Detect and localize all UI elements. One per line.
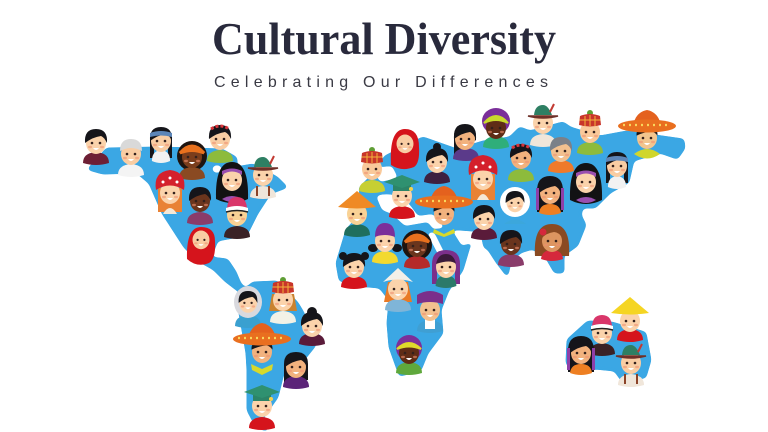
person: red hat, blond hair bbox=[269, 277, 297, 324]
person: black hair, maroon bbox=[83, 129, 109, 165]
person: hair bun, maroon bbox=[299, 307, 325, 346]
person: kokoshnik, Asia bbox=[469, 155, 497, 200]
person: red striped hat bbox=[359, 147, 385, 193]
person: red hijab bbox=[187, 227, 215, 265]
person: green mortarboard, Europe bbox=[384, 175, 420, 219]
map: North and Central America bbox=[89, 148, 286, 290]
map: Eurasia and Africa bbox=[337, 123, 684, 375]
person: floral headdress bbox=[207, 125, 233, 163]
person: black pigtails, red bbox=[339, 252, 369, 289]
person: colorful turban bbox=[482, 108, 510, 149]
person: purple hat, yellow clothes bbox=[368, 223, 402, 264]
person: black hijab bbox=[216, 162, 248, 203]
person: orange headband, Africa bbox=[402, 230, 432, 269]
person: dark skin, Asia bbox=[498, 230, 524, 267]
person: native headband, Asia bbox=[606, 152, 628, 189]
person: sombrero, yellow collar bbox=[233, 323, 291, 375]
title: Cultural Diversity bbox=[212, 14, 556, 64]
person: brown hair with flower bbox=[535, 224, 569, 261]
person: native headband bbox=[150, 127, 172, 163]
person: white hat, orange hair bbox=[383, 268, 413, 312]
person: green hat bbox=[248, 156, 278, 199]
person: black hair, Asia bbox=[471, 205, 497, 240]
person: colorful turban, South Africa bbox=[396, 335, 422, 375]
person: pink cap bbox=[224, 197, 250, 239]
person: red hat, Asia bbox=[577, 110, 603, 155]
map: South America bbox=[237, 282, 315, 430]
person: green hat, Australia bbox=[616, 344, 646, 387]
person: long hair, purple and orange bbox=[536, 176, 564, 215]
person: kokoshnik, orange hair bbox=[156, 170, 184, 214]
person: grey hair, orange robe bbox=[548, 137, 574, 173]
person: pink cap, Australia bbox=[589, 315, 615, 356]
person: purple long hair bbox=[432, 250, 460, 288]
person: sombrero, Russia bbox=[618, 110, 676, 158]
person: green hat, Asia bbox=[528, 104, 558, 147]
person: green mortarboard, red bbox=[244, 385, 280, 430]
person: hair bun, maroon, Europe bbox=[424, 143, 450, 184]
person: black hijab, Asia bbox=[570, 163, 602, 204]
person: orange headband bbox=[177, 141, 207, 180]
person: floral headdress, Asia bbox=[508, 144, 534, 182]
person: white hood, Asia bbox=[500, 187, 530, 224]
person: long black hair, purple bbox=[283, 352, 309, 389]
person: sombrero, Middle East bbox=[415, 186, 473, 237]
person: orange cone hat bbox=[338, 191, 376, 237]
person: red hijab Europe bbox=[391, 129, 419, 169]
person: long hair, Australia bbox=[567, 336, 595, 375]
person: yellow cone hat bbox=[611, 297, 649, 342]
person: purple fez bbox=[417, 291, 443, 333]
person: dark skin, purple clothes bbox=[187, 187, 213, 225]
person: white cap bbox=[118, 139, 144, 177]
map: Australia bbox=[567, 322, 650, 380]
person: black hair, yellow and purple bbox=[453, 124, 479, 161]
world map bbox=[89, 123, 684, 430]
person: white hood bbox=[234, 286, 262, 328]
subtitle: Celebrating Our Differences bbox=[214, 74, 548, 91]
